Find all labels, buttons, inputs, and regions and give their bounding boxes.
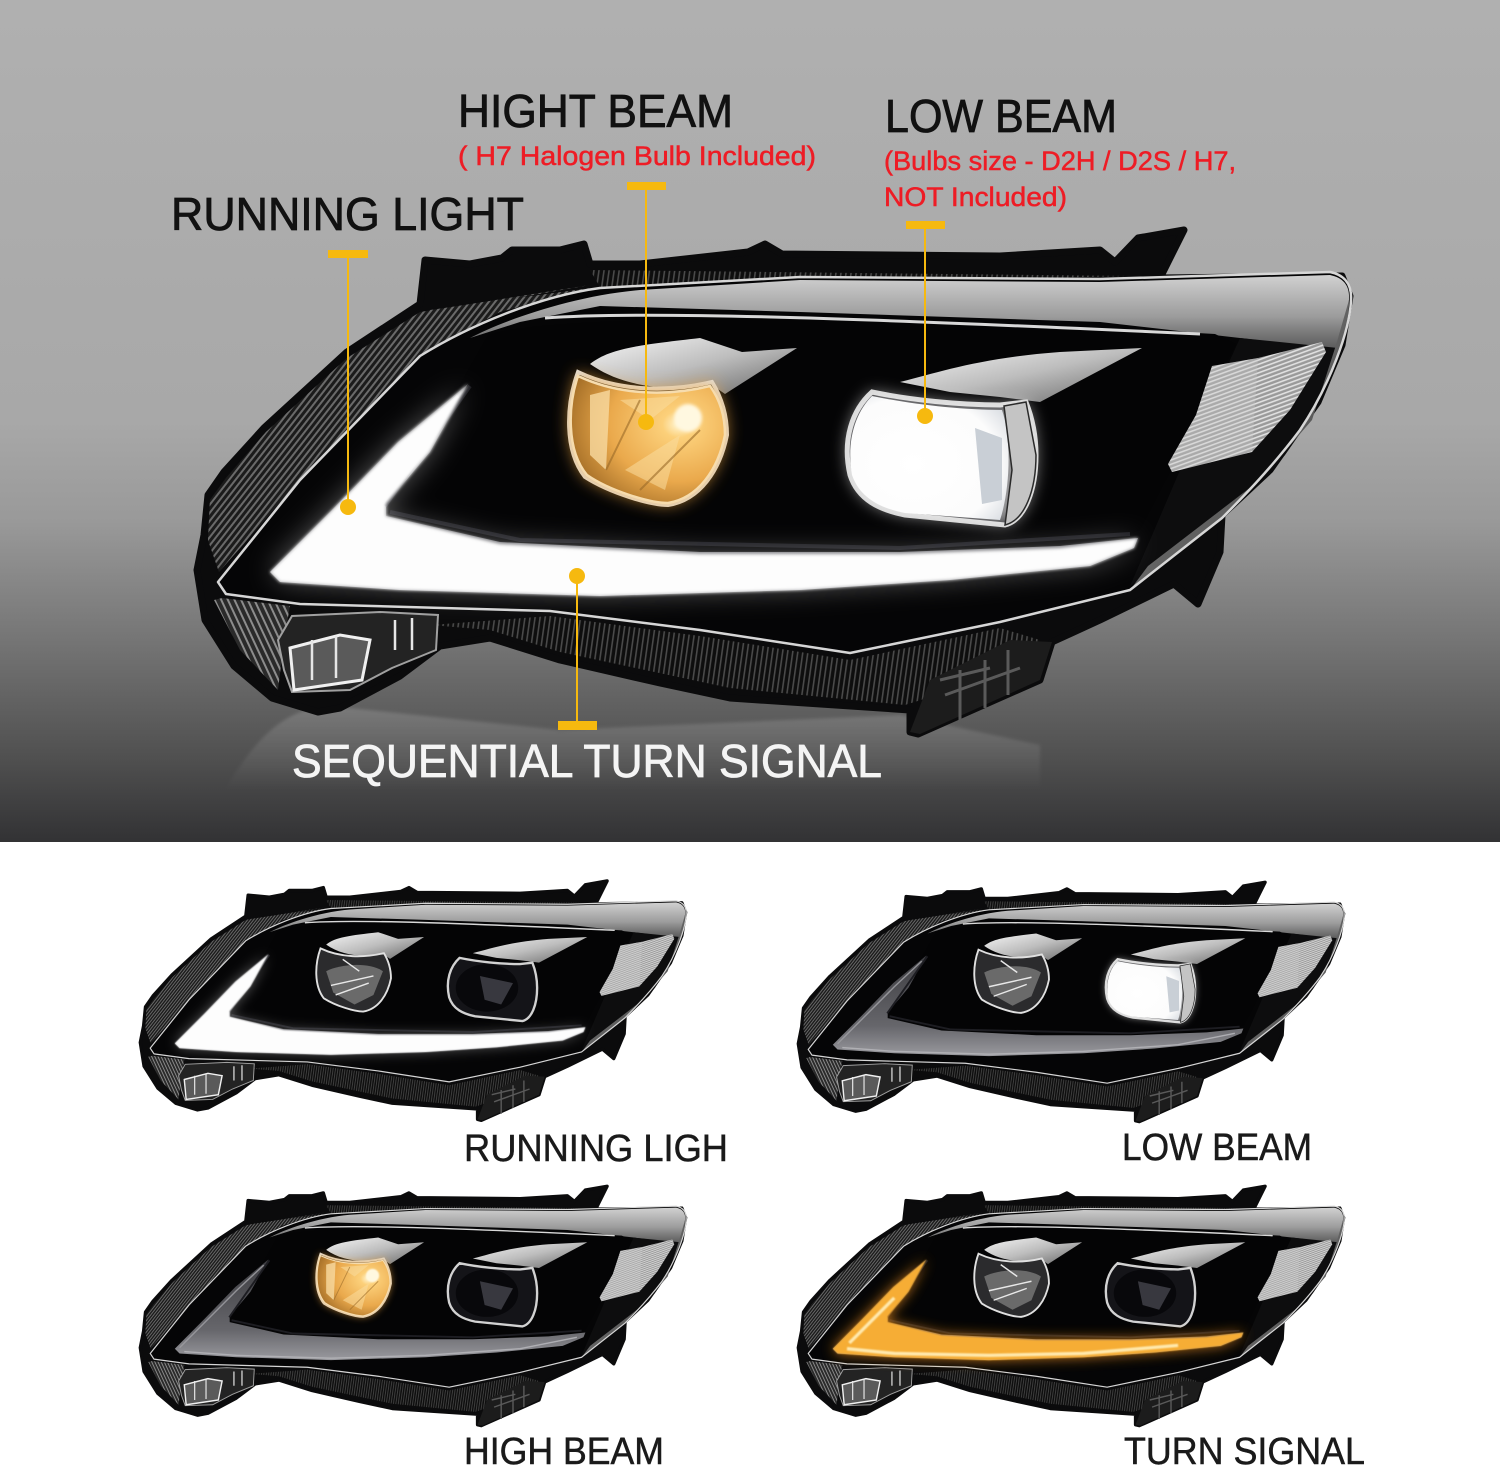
- headlight state: running light: RUNNING LIGH: [464, 1128, 728, 1170]
- callout: low beam: LOW BEAM: [885, 90, 1117, 142]
- headlight state: high beam: [140, 1186, 686, 1472]
- headlight state: running light: [140, 881, 728, 1170]
- callout: low beam: (Bulbs size - D2H / D2S / H7,: [884, 146, 1236, 176]
- main headlight illustration: [197, 230, 1351, 734]
- callout: high beam: [458, 85, 816, 430]
- panel: white lower section: [0, 842, 1500, 1472]
- callout: low beam: NOT Included): [884, 182, 1067, 212]
- headlight state: turn signal: TURN SIGNAL: [1124, 1431, 1365, 1472]
- callout: running light: RUNNING LIGHT: [171, 188, 524, 240]
- headlight state: low beam: LOW BEAM: [1122, 1127, 1312, 1169]
- callout: low beam: [884, 90, 1236, 424]
- callout: running light: [171, 188, 524, 515]
- panel: top gradient background: [0, 0, 1500, 842]
- reflection under headlight: [225, 706, 1040, 790]
- callout: high beam: HIGHT BEAM: [458, 85, 733, 137]
- headlight state: turn signal: [798, 1186, 1365, 1472]
- callout: sequential turn signal: [292, 568, 882, 787]
- headlight state: low beam: [798, 882, 1344, 1169]
- callout: high beam: ( H7 Halogen Bulb Included): [458, 141, 816, 171]
- headlight state: high beam: HIGH BEAM: [464, 1431, 664, 1472]
- callout: sequential turn signal: SEQUENTIAL TURN SIGNAL: [292, 735, 882, 787]
